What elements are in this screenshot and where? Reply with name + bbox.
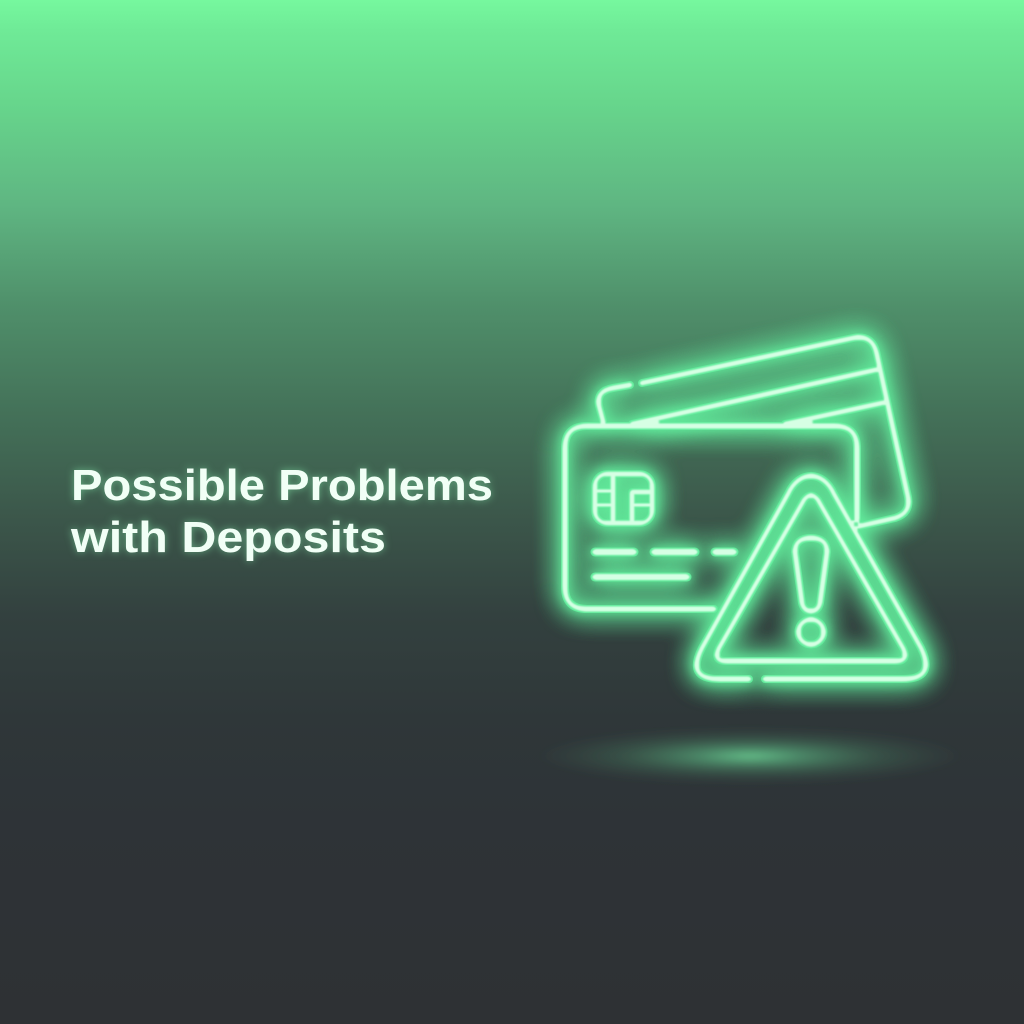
- warning triangle inner outline: [717, 496, 905, 661]
- card name line: [595, 572, 687, 582]
- card number dashes: [595, 548, 734, 556]
- exclamation mark: [795, 538, 827, 644]
- front card: [565, 426, 857, 609]
- back card: [599, 337, 908, 526]
- title: Possible Problems: [71, 461, 493, 510]
- floor glow reflection: [535, 728, 965, 784]
- warning triangle outer outline: [697, 476, 926, 679]
- icon: credit cards with warning triangle: [565, 337, 926, 679]
- title: with Deposits: [70, 513, 386, 562]
- card chip: [595, 474, 652, 523]
- title: [70, 461, 493, 562]
